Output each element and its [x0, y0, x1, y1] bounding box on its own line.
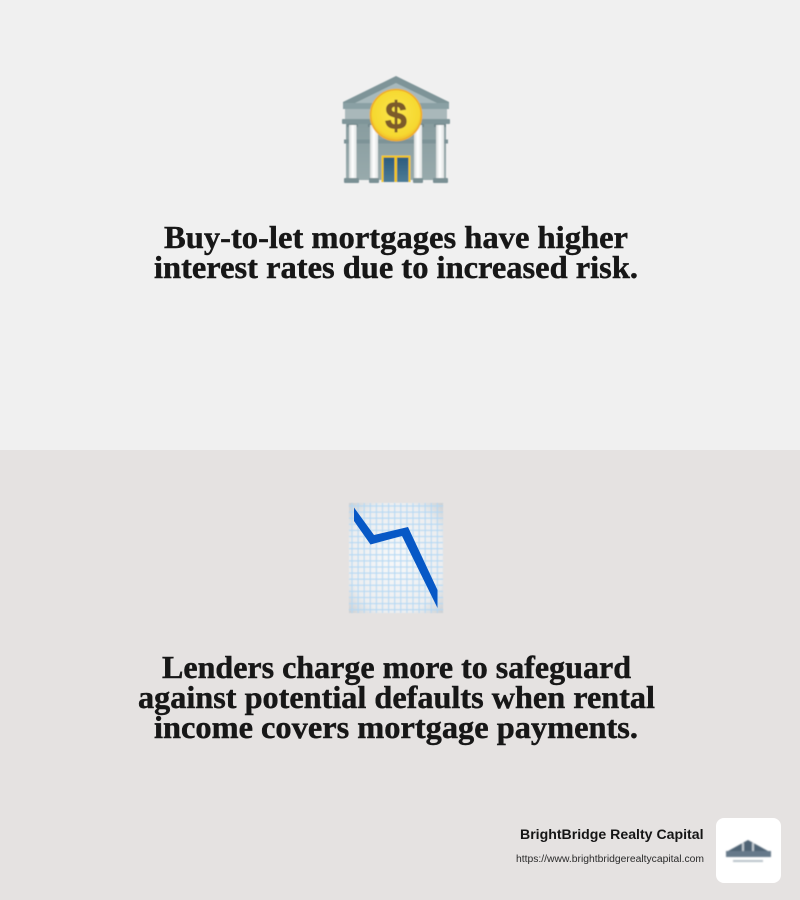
icon: bank with dollar coin: $ [385, 95, 407, 138]
heading: bottom statement: income covers mortgage payments. [154, 709, 638, 745]
heading: bottom statement: against potential defaults when rental [138, 679, 655, 715]
heading: bottom statement: Lenders charge more to safeguard [162, 649, 631, 685]
logo: company badge [716, 818, 781, 883]
panel: top section background [0, 0, 800, 450]
footer: company name: BrightBridge Realty Capital [520, 827, 704, 842]
heading: top statement: interest rates due to increased risk. [154, 249, 638, 285]
footer: website url: https://www.brightbridgerealtycapital.com [516, 854, 704, 865]
heading: top statement: Buy-to-let mortgages have higher [164, 219, 628, 255]
heading: top statement [154, 219, 638, 285]
icon: bank with dollar coin [342, 76, 450, 183]
heading: bottom statement [138, 649, 655, 745]
icon: downward chart [349, 503, 443, 613]
panel: bottom section background [0, 450, 800, 900]
